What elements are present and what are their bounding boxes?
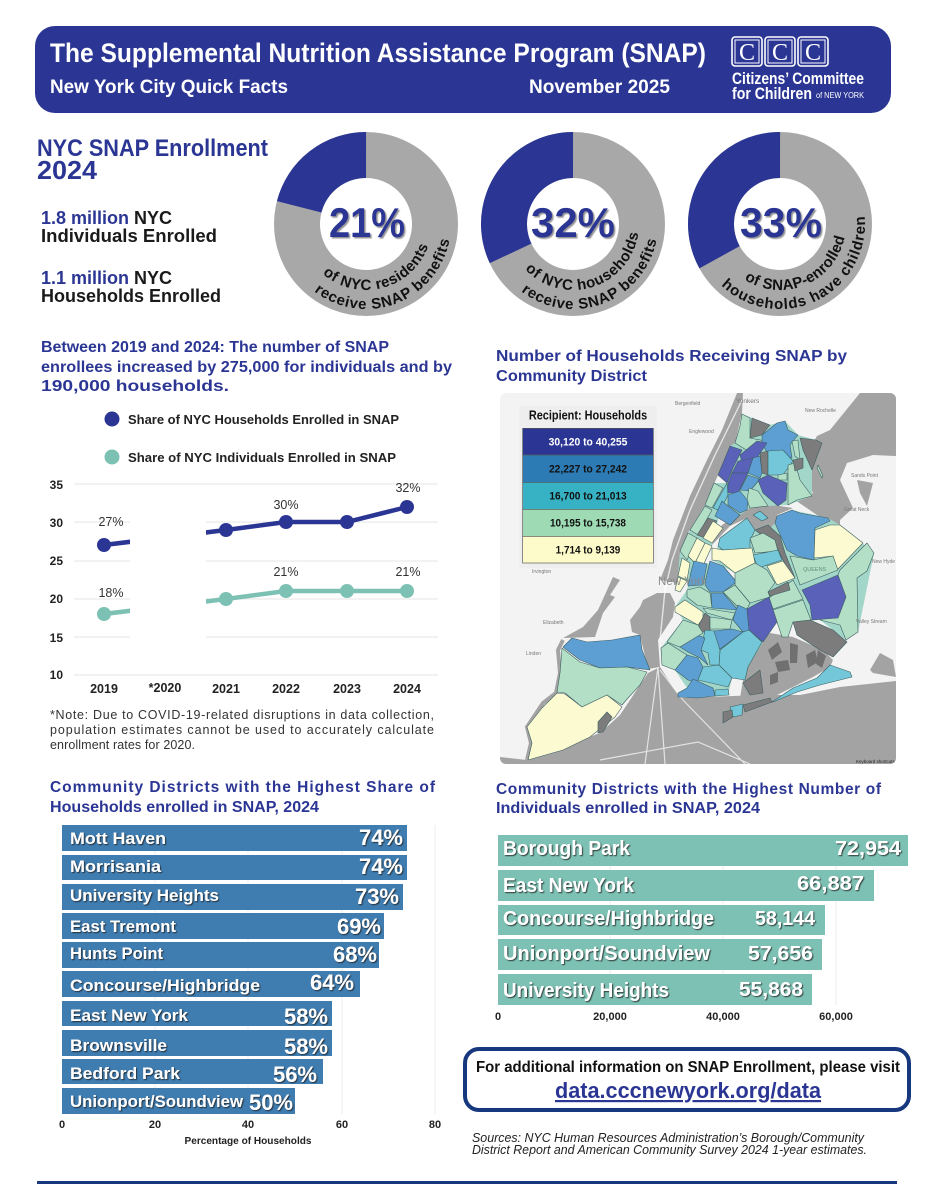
date: November 2025 — [529, 77, 670, 98]
x axis: 80 — [429, 1119, 441, 1131]
line chart: share enrolled in SNAP: 15 — [50, 631, 63, 645]
note about 2020 data: population estimates cannot be used to accurately calculate — [50, 723, 434, 737]
logo: Citizens' Committee for Children: C — [772, 40, 788, 66]
bar chart: highest share of households — [59, 825, 441, 1147]
donut chart: 21% of NYC residents: receive SNAP benefits — [314, 239, 449, 310]
bar chart: highest number of individuals — [495, 835, 908, 1023]
bar labels: 55,868 — [739, 979, 803, 1001]
heading: 2024 — [37, 155, 98, 185]
map place labels — [526, 398, 896, 764]
map place labels: Yonkers — [736, 398, 760, 405]
x axis: 20,000 — [593, 1011, 627, 1023]
bar labels: Morrisania — [70, 857, 162, 876]
line chart: share enrolled in SNAP — [50, 412, 438, 696]
bar labels: East New York — [70, 1006, 189, 1025]
callout: additional information link: data.cccnewyork.org/data — [555, 1078, 822, 1103]
line chart: share enrolled in SNAP: 2019 — [90, 682, 118, 696]
line chart: share enrolled in SNAP: 25 — [50, 554, 63, 568]
donut chart: 21% of NYC residents: 21% — [329, 199, 405, 246]
logo: Citizens' Committee for Children: for Children — [732, 85, 812, 103]
bar labels — [503, 838, 902, 1002]
line chart: share enrolled in SNAP: 30 — [50, 516, 63, 530]
bar labels: Unionport/Soundview — [503, 943, 710, 965]
bar labels: 72,954 — [835, 838, 902, 860]
logo: Citizens' Committee for Children: of NEW YORK — [816, 91, 865, 100]
heading: change between 2019 and 2024: 190,000 households. — [41, 378, 229, 395]
map place labels: Elizabeth — [543, 620, 564, 626]
map place labels: Keyboard shortcuts — [856, 759, 896, 764]
bar labels: 57,656 — [748, 943, 813, 965]
heading: change between 2019 and 2024: Between 2019 and 2024: The number of SNAP — [41, 339, 389, 356]
bar labels — [70, 825, 403, 1115]
Staten Island districts — [527, 635, 650, 760]
bar labels: East Tremont — [70, 917, 176, 936]
heading: change between 2019 and 2024: enrollees increased by 275,000 for individuals and by — [41, 359, 452, 376]
donut chart: 32% of NYC households: of NYC households — [526, 232, 638, 290]
map legend: recipient households — [519, 406, 657, 568]
x axis: 0 — [59, 1119, 65, 1131]
heading: highest number of individuals: Individuals enrolled in SNAP, 2024 — [496, 800, 760, 817]
bar labels: 66,887 — [797, 873, 864, 895]
bar labels: University Heights — [70, 886, 219, 905]
line chart: share enrolled in SNAP: 18% — [98, 586, 124, 600]
line chart: share enrolled in SNAP: 32% — [395, 481, 421, 495]
map place labels: Linden — [526, 651, 541, 657]
heading: map: Community District — [496, 368, 647, 385]
donut chart: 32% of NYC households: 32% — [531, 199, 615, 246]
map legend: recipient households: 22,227 to 27,242 — [549, 464, 627, 476]
bar labels: Hunts Point — [70, 944, 163, 963]
line chart: share enrolled in SNAP: 30% — [273, 498, 299, 512]
bar labels: 73% — [355, 884, 399, 909]
line chart: share enrolled in SNAP: 2022 — [272, 682, 300, 696]
Manhattan districts — [675, 483, 728, 592]
legend: Share of NYC Individuals Enrolled in SNAP — [128, 451, 396, 465]
bar labels: 56% — [273, 1062, 317, 1087]
bar labels: 58,144 — [755, 908, 816, 930]
line chart: share enrolled in SNAP: 2023 — [333, 682, 361, 696]
map place labels: New York — [658, 576, 707, 588]
bar labels: Borough Park — [503, 838, 631, 860]
line chart: share enrolled in SNAP: 27% — [98, 515, 124, 529]
donut chart: 32% of NYC households: receive SNAP benefits — [522, 239, 656, 310]
bar labels: 50% — [249, 1090, 293, 1115]
map place labels: New Rochelle — [805, 408, 836, 414]
x axis: 60 — [336, 1119, 348, 1131]
map legend: recipient households: 30,120 to 40,255 — [549, 437, 627, 449]
line chart: share enrolled in SNAP: 35 — [50, 478, 63, 492]
x axis — [495, 1011, 853, 1023]
note about 2020 data: enrollment rates for 2020. — [50, 738, 195, 752]
donut chart: 33% of SNAP-enrolled households: 33% — [740, 199, 822, 246]
individuals enrolled stat: NYC — [129, 208, 172, 228]
sources: Sources: NYC Human Resources Administration’s Borough/Community — [472, 1131, 865, 1145]
donut chart: 32% of NYC households — [481, 132, 665, 316]
donut chart: 33% of SNAP-enrolled households — [688, 132, 872, 316]
bar labels: 58% — [284, 1004, 328, 1029]
line chart: share enrolled in SNAP: 2021 — [212, 682, 240, 696]
bar labels: Brownsville — [70, 1036, 167, 1055]
x axis: Percentage of Households — [184, 1135, 312, 1147]
callout: additional information link — [465, 1049, 909, 1110]
title: The Supplemental Nutrition Assistance Program (SNAP) — [50, 38, 706, 68]
map place labels: Bergenfield — [675, 401, 701, 407]
line chart: share enrolled in SNAP: 21% — [273, 565, 299, 579]
map legend: recipient households: Recipient: Households — [529, 409, 647, 423]
map legend: recipient households: 16,700 to 21,013 — [549, 491, 627, 503]
logo: Citizens' Committee for Children — [732, 37, 865, 103]
map place labels: Englewood — [689, 429, 714, 435]
donut chart: 21% of NYC residents: of NYC residents — [324, 244, 428, 290]
map place labels: Valley Stream — [856, 619, 887, 625]
bar labels: East New York — [503, 875, 635, 897]
callout: additional information link: For additional information on SNAP Enrollment, please visit — [476, 1059, 901, 1076]
individuals enrolled stat: 1.8 million — [41, 208, 129, 228]
bar labels: Unionport/Soundview — [70, 1092, 244, 1111]
map place labels: Irvington — [532, 569, 551, 575]
bar labels: Concourse/Highbridge — [503, 908, 714, 930]
logo: Citizens' Committee for Children: Citizens’ Committee — [732, 70, 864, 88]
heading: highest number of individuals: Community Districts with the Highest Number of — [496, 781, 882, 798]
heading: highest share of households: Community Districts with the Highest Share of — [50, 779, 436, 796]
donut chart: 33% of SNAP-enrolled households: households have children — [722, 217, 866, 310]
line chart: share enrolled in SNAP: *2020 — [149, 681, 181, 695]
bar labels: Concourse/Highbridge — [70, 976, 260, 995]
header banner — [35, 26, 891, 113]
households enrolled stat: 1.1 million — [41, 268, 129, 288]
line chart: share enrolled in SNAP: 10 — [50, 668, 63, 682]
bar labels: Bedford Park — [70, 1064, 181, 1083]
panel: NYC SNAP Enrollment summary — [37, 135, 268, 306]
bar labels: Mott Haven — [70, 829, 166, 848]
map place labels: Sands Point — [851, 473, 879, 479]
logo: Citizens' Committee for Children: C — [805, 40, 821, 66]
donut chart: 21% of NYC residents — [274, 132, 458, 316]
bar labels: 68% — [333, 942, 377, 967]
heading: highest share of households: Households enrolled in SNAP, 2024 — [50, 799, 319, 816]
Bronx districts — [715, 414, 823, 525]
Queens districts — [712, 510, 874, 657]
heading: map: Number of Households Receiving SNAP by — [496, 348, 847, 365]
donut chart: 33% of SNAP-enrolled households: of SNAP-enrolled — [746, 235, 844, 290]
note about 2020 data: *Note: Due to COVID-19-related disruptions in data collection, — [50, 708, 434, 722]
x axis — [59, 1119, 441, 1147]
bar labels: University Heights — [503, 980, 669, 1002]
bar labels: 64% — [310, 970, 354, 995]
sources: District Report and American Community Survey 2024 1-year estimates. — [472, 1143, 867, 1157]
households enrolled stat: Households Enrolled — [41, 286, 221, 306]
map place labels: QUEENS — [803, 567, 827, 573]
individuals enrolled stat: Individuals Enrolled — [41, 226, 217, 246]
map legend: recipient households: 1,714 to 9,139 — [556, 544, 620, 556]
line chart: share enrolled in SNAP: 20 — [50, 592, 63, 606]
households enrolled stat: NYC — [129, 268, 172, 288]
legend: Share of NYC Households Enrolled in SNAP — [128, 413, 399, 427]
choropleth map of NYC community districts — [500, 393, 896, 764]
line chart: share enrolled in SNAP: 21% — [395, 565, 421, 579]
bar labels: 58% — [284, 1034, 328, 1059]
x axis: 40,000 — [706, 1011, 740, 1023]
x axis: 40 — [242, 1119, 254, 1131]
heading: NYC SNAP Enrollment — [37, 135, 268, 162]
map place labels: Great Neck — [844, 507, 870, 513]
logo: Citizens' Committee for Children: C — [739, 40, 755, 66]
x axis: 20 — [149, 1119, 161, 1131]
map legend: recipient households: 10,195 to 15,738 — [550, 518, 626, 530]
x axis: 60,000 — [819, 1011, 853, 1023]
legend — [104, 412, 399, 465]
x axis: 0 — [495, 1011, 501, 1023]
bar labels: 69% — [337, 914, 381, 939]
subtitle: New York City Quick Facts — [50, 77, 288, 98]
Brooklyn districts — [661, 561, 852, 723]
line chart: share enrolled in SNAP: 2024 — [393, 682, 421, 696]
bar labels: 74% — [359, 825, 403, 850]
bar labels: 74% — [359, 854, 403, 879]
map place labels: New Hyde — [872, 559, 895, 565]
